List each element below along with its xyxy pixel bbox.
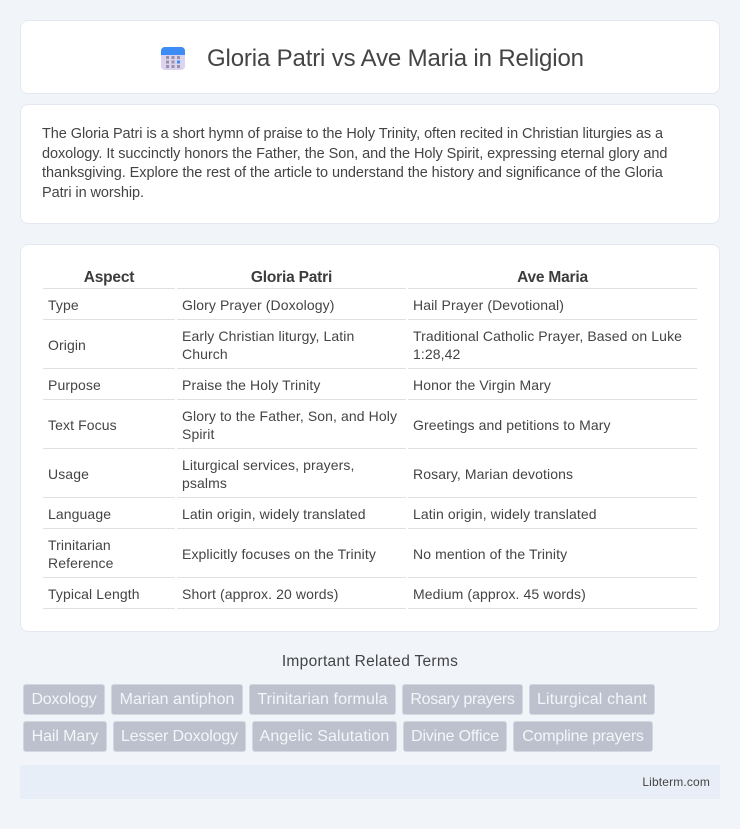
related terms tags: Compline prayers xyxy=(522,728,644,745)
intro paragraph xyxy=(42,126,667,200)
row: purpose xyxy=(48,377,551,393)
row: origin: Church xyxy=(182,346,228,362)
table header: Gloria Patri xyxy=(251,269,332,286)
row: text focus: Text Focus xyxy=(48,417,117,433)
row: type: Type xyxy=(48,297,79,313)
comparison table panel xyxy=(20,244,720,632)
row: origin xyxy=(48,328,682,362)
related terms heading: Important Related Terms xyxy=(282,653,458,670)
table header: Aspect xyxy=(84,269,134,286)
related terms tags: Hail Mary xyxy=(32,728,98,745)
intro paragraph: thanksgiving. Explore the rest of the article to understand the history and significance of the Gloria xyxy=(42,165,663,181)
row: typical length xyxy=(48,586,586,602)
related terms tags xyxy=(23,684,655,752)
row: trinitarian reference: No mention of the Trinity xyxy=(413,546,567,562)
table header: Ave Maria xyxy=(517,269,588,286)
intro paragraph: The Gloria Patri is a short hymn of praise to the Holy Trinity, often recited in Christian liturgies as a xyxy=(42,126,663,142)
row: language: Latin origin, widely translated xyxy=(413,506,597,522)
title: Gloria Patri vs Ave Maria in Religion xyxy=(207,45,584,72)
row: usage: Liturgical services, prayers, xyxy=(182,457,355,473)
row: type: Hail Prayer (Devotional) xyxy=(413,297,564,313)
row: trinitarian reference: Explicitly focuses on the Trinity xyxy=(182,546,376,562)
row: text focus: Spirit xyxy=(182,426,214,442)
row: usage: psalms xyxy=(182,475,227,491)
footer source: Libterm.com xyxy=(642,775,710,789)
row: language xyxy=(48,506,597,522)
related terms tags: Divine Office xyxy=(411,728,499,745)
row: text focus: Greetings and petitions to Mary xyxy=(413,417,611,433)
row: origin: Early Christian liturgy, Latin xyxy=(182,328,354,344)
related terms tags: Lesser Doxology xyxy=(121,728,238,745)
row: trinitarian reference: Reference xyxy=(48,555,114,571)
row: trinitarian reference: Trinitarian xyxy=(48,537,111,553)
row: trinitarian reference xyxy=(48,537,568,571)
header panel xyxy=(20,20,720,94)
intro paragraph: doxology. It succinctly honors the Father, the Son, and the Holy Spirit, expressing eternal glory and xyxy=(42,146,667,162)
row: origin: Origin xyxy=(48,337,86,353)
row: origin: Traditional Catholic Prayer, Based on Luke xyxy=(413,328,682,344)
icon: calendar xyxy=(161,47,185,70)
row: typical length: Typical Length xyxy=(48,586,140,602)
related terms tags: Liturgical chant xyxy=(537,691,647,708)
row: purpose: Purpose xyxy=(48,377,101,393)
row: type: Glory Prayer (Doxology) xyxy=(182,297,334,313)
row: purpose: Praise the Holy Trinity xyxy=(182,377,320,393)
intro text panel xyxy=(20,104,720,224)
row: type xyxy=(48,297,564,313)
row: usage: Usage xyxy=(48,466,89,482)
related terms tags: Doxology xyxy=(31,691,97,708)
related terms tags: Marian antiphon xyxy=(120,691,234,708)
related terms tags: Rosary prayers xyxy=(410,691,515,708)
footer bar xyxy=(20,765,720,799)
related terms tags: Angelic Salutation xyxy=(260,728,389,745)
row: language: Latin origin, widely translated xyxy=(182,506,366,522)
intro paragraph: Patri in worship. xyxy=(42,184,144,200)
row: text focus: Glory to the Father, Son, and Holy xyxy=(182,408,397,424)
table header xyxy=(84,269,588,286)
row: usage xyxy=(48,457,573,491)
row: text focus xyxy=(48,408,611,442)
related terms tags: Trinitarian formula xyxy=(257,691,388,708)
row: typical length: Medium (approx. 45 words) xyxy=(413,586,586,602)
row: language: Language xyxy=(48,506,111,522)
row: usage: Rosary, Marian devotions xyxy=(413,466,573,482)
row: origin: 1:28,42 xyxy=(413,346,460,362)
row: typical length: Short (approx. 20 words) xyxy=(182,586,338,602)
row: purpose: Honor the Virgin Mary xyxy=(413,377,551,393)
